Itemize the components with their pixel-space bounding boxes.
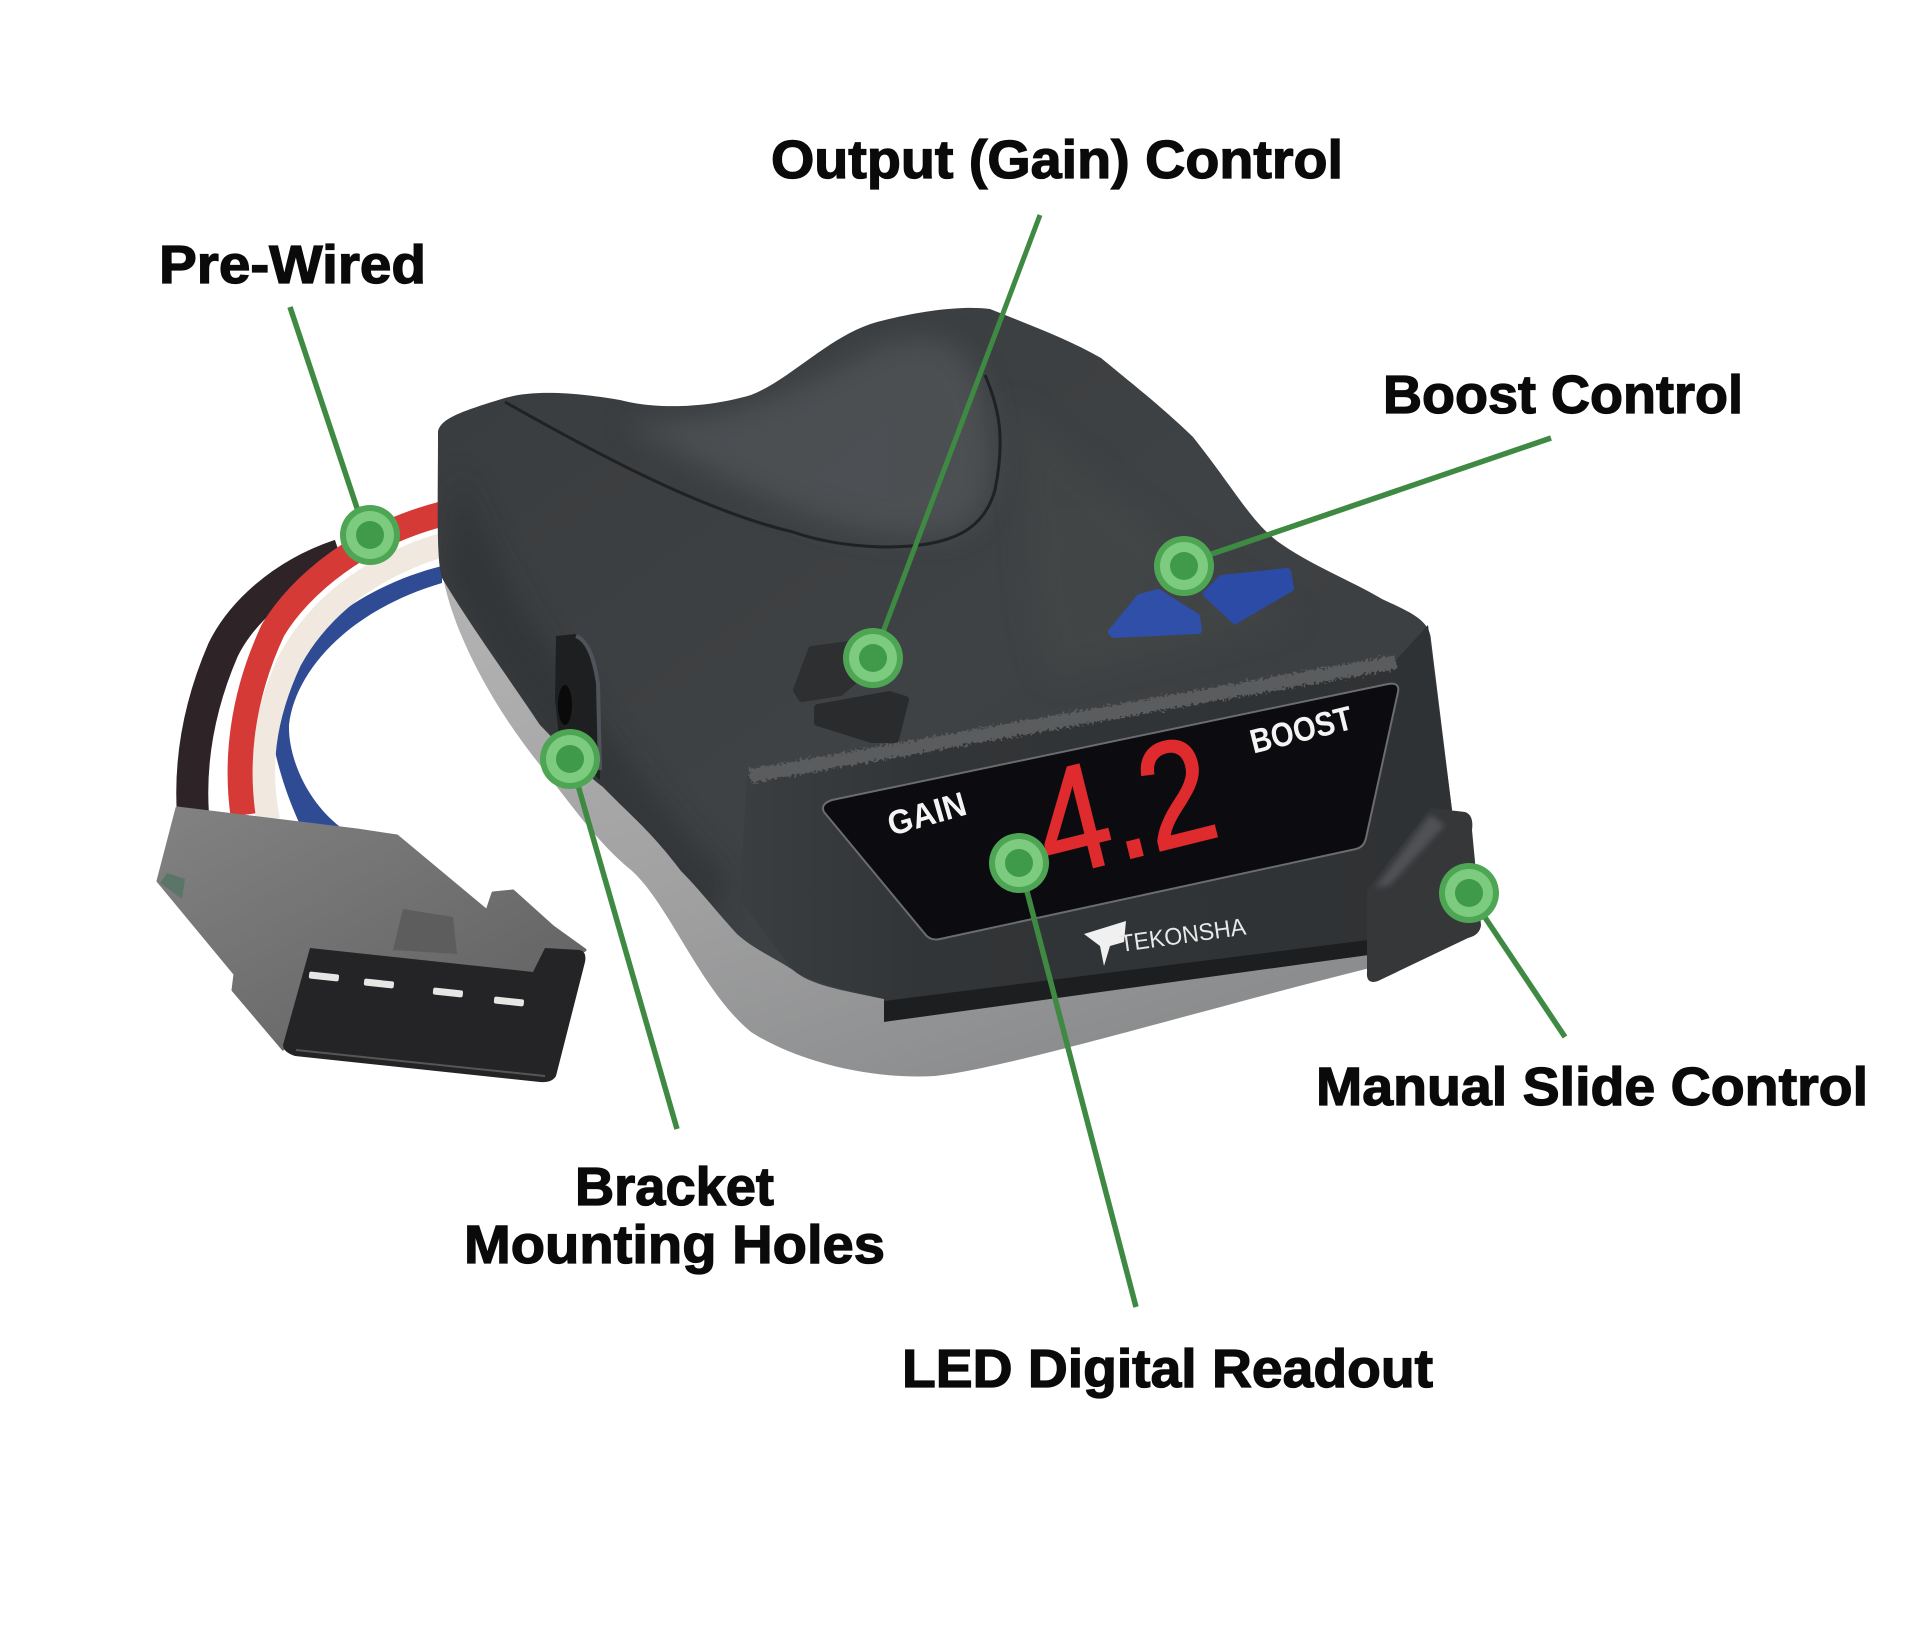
callout: Output (Gain) Control <box>843 215 1040 688</box>
label: Output (Gain) Control: Output (Gain) Control <box>771 130 1343 190</box>
textured edge <box>750 662 1396 776</box>
callout: Boost Control <box>1154 438 1551 596</box>
LED reading: 4.2 <box>1018 703 1231 909</box>
callout: LED Digital Readout <box>989 833 1136 1307</box>
boost buttons <box>1112 572 1290 634</box>
label: Pre-Wired: Pre-Wired <box>159 235 426 295</box>
gray base plate <box>442 570 1372 1076</box>
callout: Bracket Mounting Holes <box>540 729 677 1129</box>
callout: Manual Slide Control <box>1439 863 1565 1037</box>
gain buttons <box>797 645 905 739</box>
connector key tab <box>393 909 457 954</box>
display screen <box>823 684 1398 939</box>
Tekonsha logo <box>1084 914 1248 966</box>
wiring harness <box>192 514 442 835</box>
GAIN label: GAIN <box>883 785 971 844</box>
manual slide knob <box>1367 808 1481 982</box>
mounting bracket tab <box>555 634 600 780</box>
top surface shading <box>445 339 1300 940</box>
Tekonsha logo: TEKONSHA <box>1118 914 1248 958</box>
label: Boost Control: Boost Control <box>1383 365 1743 425</box>
wiring connector plug <box>158 808 585 1082</box>
housing groove <box>505 375 1000 547</box>
BOOST label: BOOST <box>1246 699 1357 761</box>
lower front lip <box>884 940 1368 1022</box>
connector pins <box>309 971 524 1007</box>
connector latch <box>160 873 185 899</box>
front face <box>740 625 1452 1020</box>
callout lines and markers <box>290 215 1565 1307</box>
device photo: brake controller illustration <box>158 308 1481 1082</box>
label: Bracket Mounting Holes: Bracket <box>575 1157 774 1217</box>
label: Bracket Mounting Holes: Mounting Holes <box>464 1215 885 1275</box>
callout: Pre-Wired <box>290 307 400 565</box>
label: Manual Slide Control: Manual Slide Control <box>1316 1057 1868 1117</box>
main housing <box>438 308 1481 1022</box>
label: LED Digital Readout: LED Digital Readout <box>902 1339 1433 1399</box>
label: Bracket Mounting Holes <box>464 1157 885 1275</box>
